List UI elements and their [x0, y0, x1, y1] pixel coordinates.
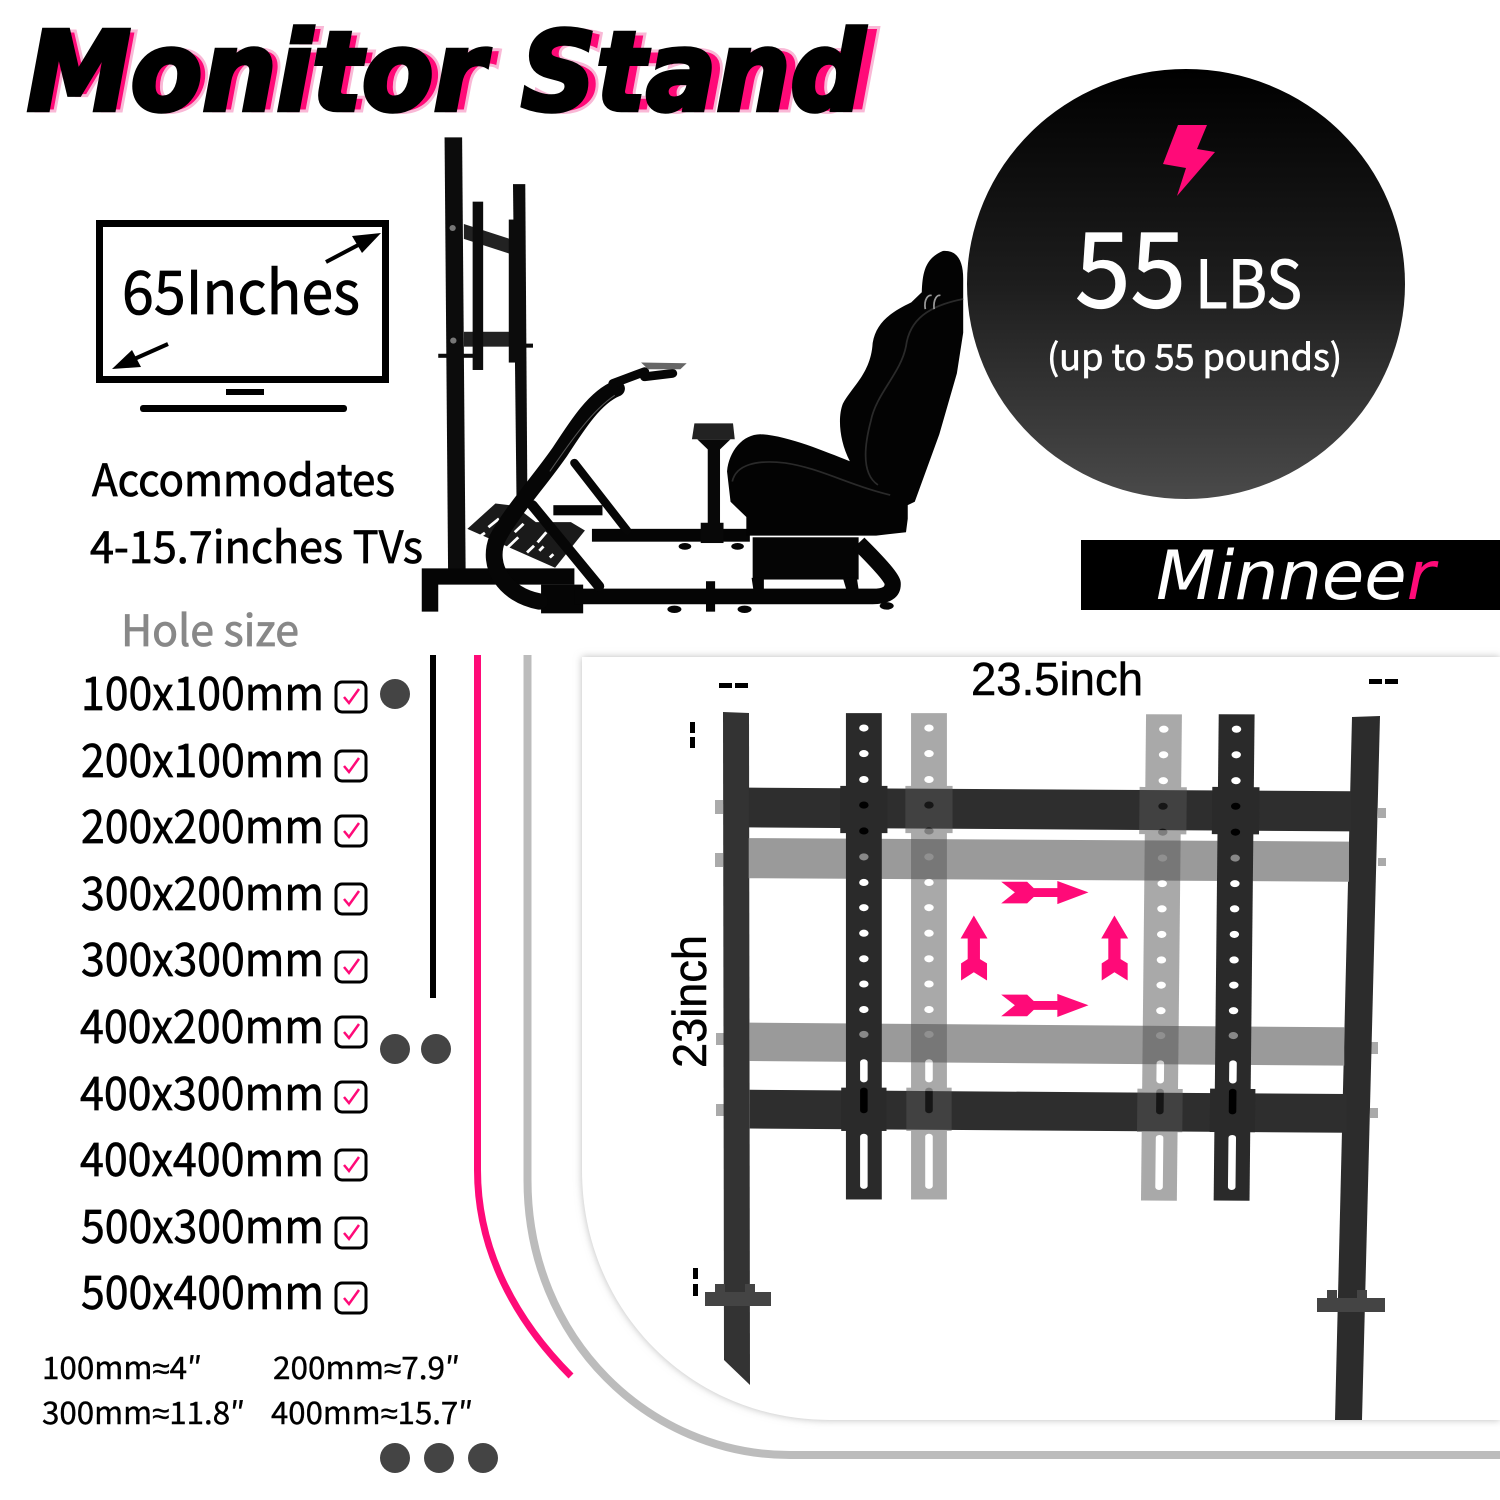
base frame [422, 505, 894, 613]
icon: TV 65 inches [100, 224, 386, 412]
text: accommodates TVs: Accommodates [92, 445, 395, 509]
dimension: 23.5inch: 23.5inch [971, 653, 1143, 705]
unit conversions: 300mm≈11.8″ [42, 1388, 245, 1433]
dimension ticks [690, 679, 1398, 1296]
racing simulator stand with seat [422, 137, 963, 613]
mounting bracket assembly [749, 713, 1351, 1201]
hole size list: 300x300mm [81, 924, 324, 990]
hole size list: 300x200mm [81, 858, 324, 924]
hole size list [80, 658, 324, 1323]
icon: lightning bolt [1163, 125, 1215, 196]
dark rails [749, 788, 1351, 1133]
wheel plate [641, 363, 687, 369]
hole size list: 500x300mm [81, 1191, 324, 1257]
wheel mount arch [494, 372, 673, 602]
unit conversions: 200mm≈7.9″ [273, 1343, 460, 1388]
capacity circle: LBS [1195, 232, 1302, 328]
grey curved line [528, 655, 1500, 1455]
unit conversions [42, 1343, 473, 1433]
pink arrows [961, 881, 1128, 1017]
detail panel [582, 653, 1500, 1420]
icon: TV 65 inches: 65Inches [122, 245, 360, 332]
brand banner [1081, 537, 1500, 616]
black divider line [430, 655, 436, 998]
unit conversions: 400mm≈15.7″ [271, 1388, 473, 1433]
brand banner: Minneer [1156, 537, 1439, 616]
faded brackets [905, 713, 953, 1199]
dimension: 23inch: 23inch [663, 935, 716, 1068]
hole size list: 400x200mm [80, 991, 324, 1057]
hole size list: 100x100mm [81, 658, 324, 724]
light rails [749, 838, 1349, 1066]
text: accommodates TVs [90, 445, 423, 576]
hole size list: 400x400mm [80, 1124, 324, 1190]
heading: hole size: Hole size [121, 597, 299, 659]
racing seat [727, 251, 963, 536]
shifter mount [692, 423, 735, 543]
text: accommodates TVs: 4-15.7inches TVs [90, 512, 423, 576]
post bolts [715, 800, 1386, 1118]
capacity circle: 55 [1075, 186, 1186, 337]
title: Monitor Stand [27, 8, 866, 136]
rear monitor posts [438, 137, 533, 569]
capacity circle: (up to 55 pounds) [1047, 329, 1342, 381]
hole size list: 200x200mm [81, 791, 324, 857]
unit conversions: 100mm≈4″ [42, 1343, 202, 1388]
dark brackets [840, 713, 887, 1199]
hole size list: 500x400mm [81, 1257, 324, 1323]
checkboxes [336, 682, 366, 1313]
hole size list: 400x300mm [80, 1058, 324, 1124]
hole size list: 200x100mm [81, 725, 324, 791]
pedal plate [467, 503, 585, 568]
grouping dots [380, 679, 498, 1473]
title: Monitor Stand [34, 9, 879, 137]
capacity circle [967, 69, 1405, 499]
pink curved line [478, 655, 571, 1376]
uprights and clamps [705, 712, 1385, 1420]
